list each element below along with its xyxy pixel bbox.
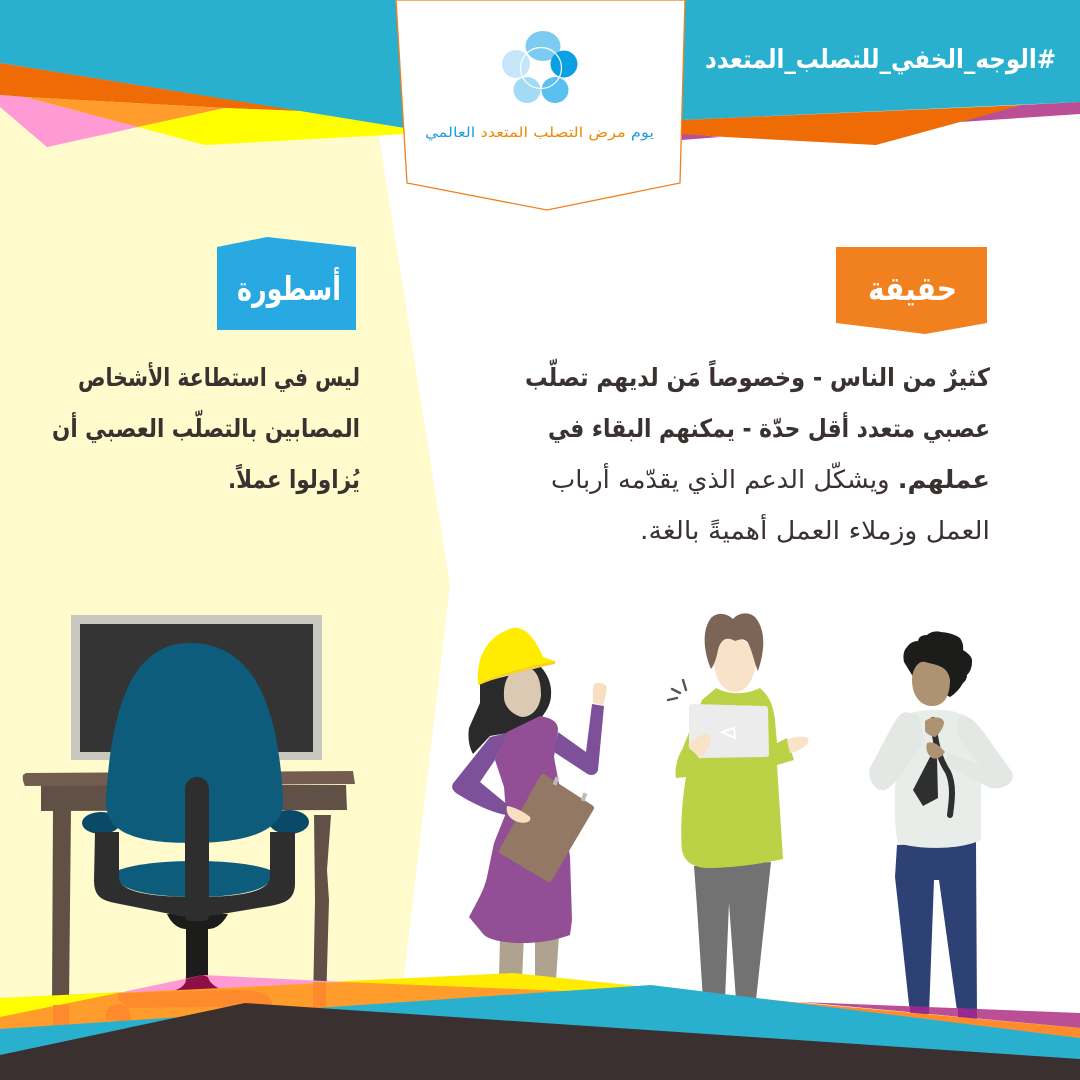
illustration: office chair — [82, 643, 309, 993]
fact tag: حقيقة — [868, 269, 957, 308]
illustration: desk and monitor — [23, 615, 355, 1005]
desk leg and wheel overlap — [53, 982, 326, 1027]
myth text block — [52, 362, 360, 495]
logo badge — [396, 0, 685, 210]
fact text block: عصبي متعدد أقل حدّة - يمكنهم البقاء في — [548, 412, 990, 444]
fact text block — [525, 359, 990, 546]
fact tag — [836, 247, 987, 334]
top banner left — [0, 0, 404, 147]
bottom decorative bands — [0, 973, 1080, 1080]
logo: five circles — [502, 31, 578, 103]
illustration: woman with hard hat — [452, 628, 607, 980]
fact text block: كثيرٌ من الناس - وخصوصاً مَن لديهم تصلّب — [525, 359, 990, 393]
logo caption: يوم مرض التصلب المتعدد العالمي — [425, 125, 654, 141]
myth tag — [217, 237, 356, 330]
illustration: man with laptop — [668, 613, 808, 1000]
myth text block: يُزاولوا عملاً. — [228, 463, 360, 495]
myth text block: المصابين بالتصلّب العصبي أن — [52, 410, 360, 444]
panel: myth background — [0, 100, 450, 1010]
top banner right — [682, 0, 1080, 145]
myth text block: ليس في استطاعة الأشخاص — [78, 362, 360, 392]
fact text block: العمل وزملاء العمل أهميةً بالغة. — [640, 513, 990, 546]
illustration: man with tie — [869, 631, 1013, 1018]
fact text block: عملهم. ويشكّل الدعم الذي يقدّمه أرباب — [551, 462, 990, 495]
myth tag: أسطورة — [237, 267, 341, 309]
chair base overlap — [168, 975, 232, 993]
